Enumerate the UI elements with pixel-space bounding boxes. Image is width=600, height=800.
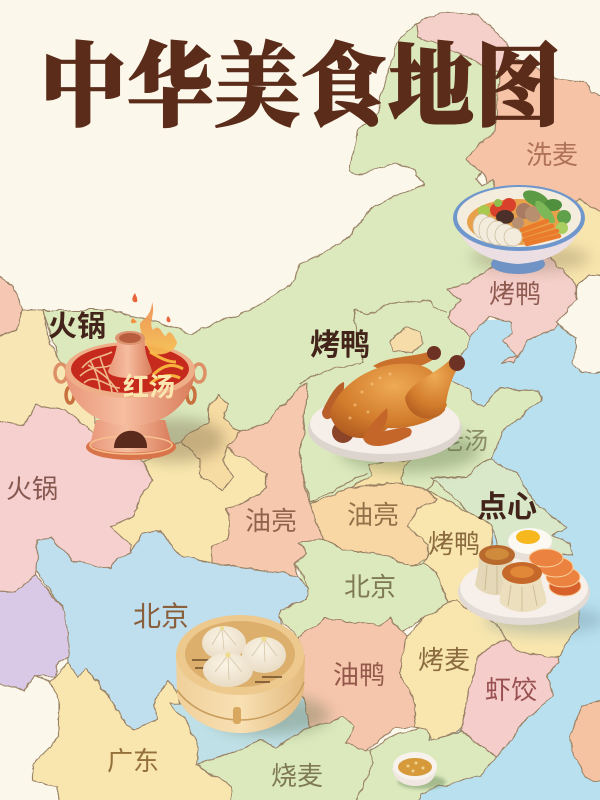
region: north-east yellow bbox=[540, 200, 600, 287]
label 烤鸭 north-east: 烤鸭 bbox=[489, 279, 541, 309]
sea bbox=[400, 320, 600, 800]
label 北京 east: 北京 bbox=[344, 572, 396, 602]
region: liaoning pink bbox=[447, 257, 577, 363]
duck glaze bbox=[348, 372, 392, 420]
icon: bamboo steamer bbox=[176, 615, 330, 735]
pot label 红汤: 红汤 bbox=[123, 372, 175, 402]
icon: hotpot bbox=[55, 293, 225, 462]
duck body bbox=[330, 364, 447, 438]
central land underlay bbox=[300, 380, 500, 620]
title: 中华美食地图 bbox=[40, 38, 562, 139]
region: orange centre bbox=[310, 483, 437, 567]
region: jiangsu green bbox=[433, 460, 573, 560]
shumai left bbox=[475, 545, 515, 595]
label 火锅 west: 火锅 bbox=[6, 474, 58, 504]
buns bbox=[202, 626, 286, 687]
region: hubei green bbox=[279, 538, 447, 638]
label 油鸭: 油鸭 bbox=[333, 660, 385, 690]
heading 烤鸭: 烤鸭 bbox=[310, 329, 370, 362]
egg bbox=[508, 528, 552, 562]
label 老汤: 老汤 bbox=[440, 428, 488, 455]
region: tibet pink bbox=[0, 405, 153, 592]
steamer clasp bbox=[233, 707, 241, 724]
duck lower wing bbox=[363, 408, 412, 446]
duck back leg bbox=[373, 350, 436, 372]
inner border: hebei bbox=[300, 300, 447, 503]
region: guangdong green bbox=[354, 725, 497, 800]
region: northern green bbox=[43, 23, 500, 503]
flames bbox=[131, 293, 177, 354]
region: anhui yellow bbox=[408, 490, 493, 608]
chimney bbox=[108, 331, 152, 378]
region: cream south-west bbox=[0, 675, 61, 800]
region: fujian-side yellow bbox=[400, 600, 505, 740]
label 烤麦: 烤麦 bbox=[418, 645, 470, 675]
steamer slats bbox=[192, 660, 282, 682]
label 广东: 广东 bbox=[107, 746, 159, 776]
hotpot stand bbox=[86, 420, 176, 460]
icon: sauce dish bbox=[392, 752, 446, 789]
region: zhejiang yellow bbox=[465, 590, 580, 657]
region: purple bbox=[0, 575, 69, 690]
region: ningxia tan bbox=[180, 395, 240, 490]
heading 点心: 点心 bbox=[477, 491, 537, 524]
region: shandong green bbox=[400, 380, 542, 490]
region: central yellow bbox=[110, 440, 267, 563]
label 洗麦: 洗麦 bbox=[526, 140, 578, 170]
label 油亮 left: 油亮 bbox=[245, 506, 297, 536]
region: north-east salmon bbox=[465, 55, 600, 240]
label 烤鸭 east: 烤鸭 bbox=[428, 529, 480, 559]
region: henan yellow strip bbox=[350, 460, 410, 487]
label 油亮 centre: 油亮 bbox=[347, 500, 399, 530]
region: yunnan yellow bbox=[33, 662, 233, 800]
hotpot handles bbox=[55, 364, 205, 403]
region: fujian pink bbox=[461, 638, 559, 757]
carrot slices bbox=[529, 549, 581, 596]
hotpot noodles bbox=[80, 352, 120, 392]
icon: noodle bowl bbox=[453, 185, 590, 274]
region: shaanxi salmon bbox=[212, 383, 323, 578]
region: top-left salmon bbox=[0, 272, 23, 338]
region: gansu yellow bbox=[0, 310, 100, 440]
map labels bbox=[6, 140, 578, 791]
duck wing bbox=[322, 382, 344, 419]
region: jiangxi salmon bbox=[299, 618, 415, 750]
region: cream north-east coast bbox=[555, 273, 600, 372]
region: north-east pink bbox=[417, 12, 520, 80]
region: beijing tan bbox=[390, 327, 422, 353]
label 虾饺: 虾饺 bbox=[485, 675, 537, 705]
label 烧麦: 烧麦 bbox=[271, 761, 323, 791]
region: guizhou blue bbox=[170, 697, 310, 765]
duck front leg bbox=[405, 358, 459, 419]
label 北京 west: 北京 bbox=[133, 601, 189, 632]
region: sichuan blue bbox=[36, 530, 310, 730]
icon: dim sum plate bbox=[458, 528, 600, 634]
heading 火锅: 火锅 bbox=[48, 310, 106, 343]
region: guangxi green bbox=[197, 717, 373, 800]
shumai right bbox=[500, 562, 546, 612]
region: taiwan bbox=[570, 698, 600, 782]
icon: roast duck bbox=[308, 346, 480, 472]
